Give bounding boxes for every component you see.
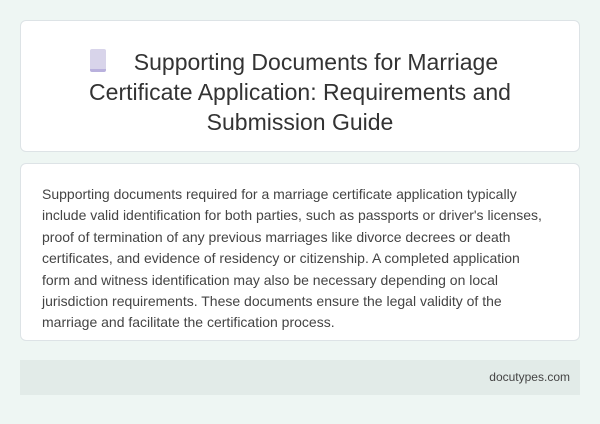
panel: title <box>20 20 580 152</box>
footer text: docutypes.com <box>489 370 570 384</box>
title: Submission Guide <box>207 109 393 135</box>
icon: document <box>90 49 106 72</box>
title <box>89 49 511 135</box>
footer <box>20 360 580 395</box>
panel: description <box>20 163 580 341</box>
title: Certificate Application: Requirements and <box>89 79 511 105</box>
text block: Supporting documents required for a marriage certificate application typically include valid identification for both parties, such as passports or driver's licenses, proof of termination of any previous marriages like divorce decrees or death certificates, and evidence of residency or citizenship. A completed application form and witness identification may also be necessary depending on local jurisdiction requirements. These documents ensure the legal validity of the marriage and facilitate the certification process. <box>42 186 542 330</box>
title: Supporting Documents for Marriage <box>134 49 498 75</box>
